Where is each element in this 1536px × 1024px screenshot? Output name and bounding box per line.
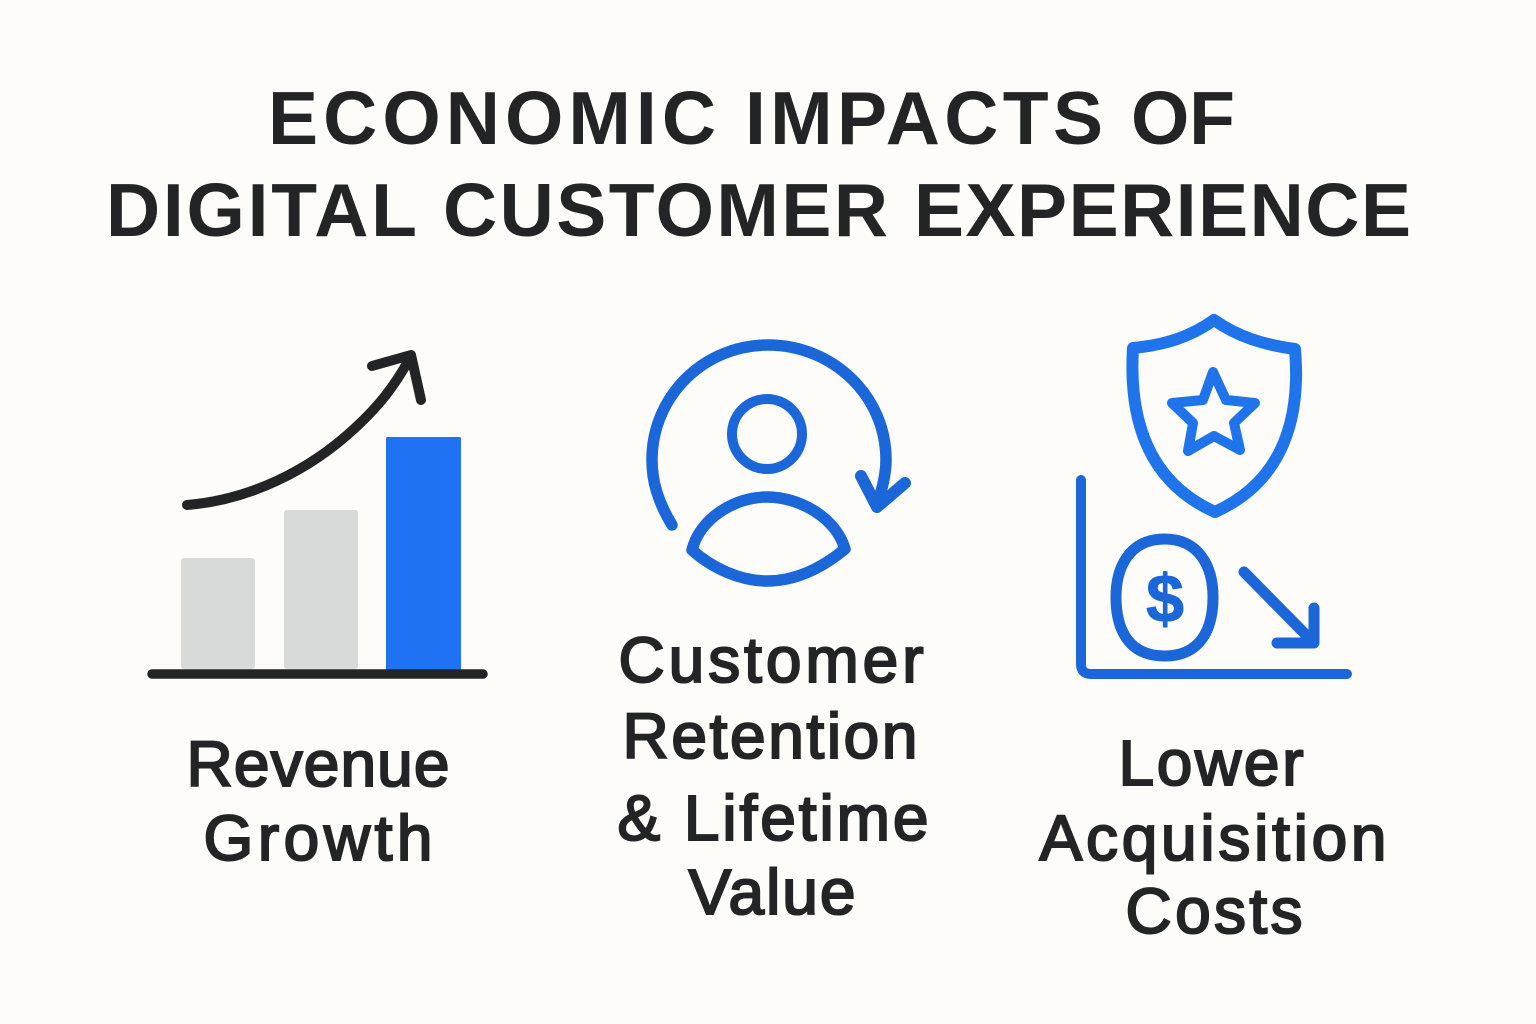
label: lower acquisition costs: Lower bbox=[1118, 727, 1304, 799]
title: OF bbox=[1131, 76, 1235, 160]
label: lower acquisition costs: Acquisition bbox=[1040, 802, 1386, 874]
title bbox=[106, 76, 1411, 252]
label: customer retention: & Lifetime bbox=[618, 782, 928, 854]
title: DIGITAL bbox=[106, 168, 417, 252]
label: revenue growth bbox=[186, 728, 450, 874]
label: lower acquisition costs bbox=[1040, 727, 1386, 947]
label: revenue growth: Revenue bbox=[186, 728, 450, 800]
label: customer retention bbox=[618, 624, 928, 928]
panel: revenue growth bbox=[152, 355, 483, 874]
title: EXPERIENCE bbox=[914, 168, 1411, 252]
title: ECONOMIC bbox=[268, 76, 716, 160]
title: IMPACTS bbox=[745, 76, 1103, 160]
icon: customer with retention arrow bbox=[652, 345, 905, 581]
icon: bar chart with rising arrow bbox=[152, 355, 483, 674]
icon: downward arrow bbox=[1244, 572, 1314, 643]
label: customer retention: Retention bbox=[622, 700, 918, 772]
icon: falling cost chart bbox=[1081, 480, 1347, 674]
panel: customer retention bbox=[618, 345, 928, 928]
label: customer retention: Customer bbox=[618, 624, 924, 696]
icon: shield with star bbox=[1132, 320, 1296, 512]
icon: dollar coin bbox=[1116, 539, 1213, 656]
label: revenue growth: Growth bbox=[204, 802, 432, 874]
title: CUSTOMER bbox=[443, 168, 888, 252]
panel: lower acquisition costs bbox=[1040, 320, 1386, 947]
icon: dollar coin: $ bbox=[1146, 561, 1184, 637]
label: lower acquisition costs: Costs bbox=[1126, 875, 1302, 947]
label: customer retention: Value bbox=[688, 856, 856, 928]
